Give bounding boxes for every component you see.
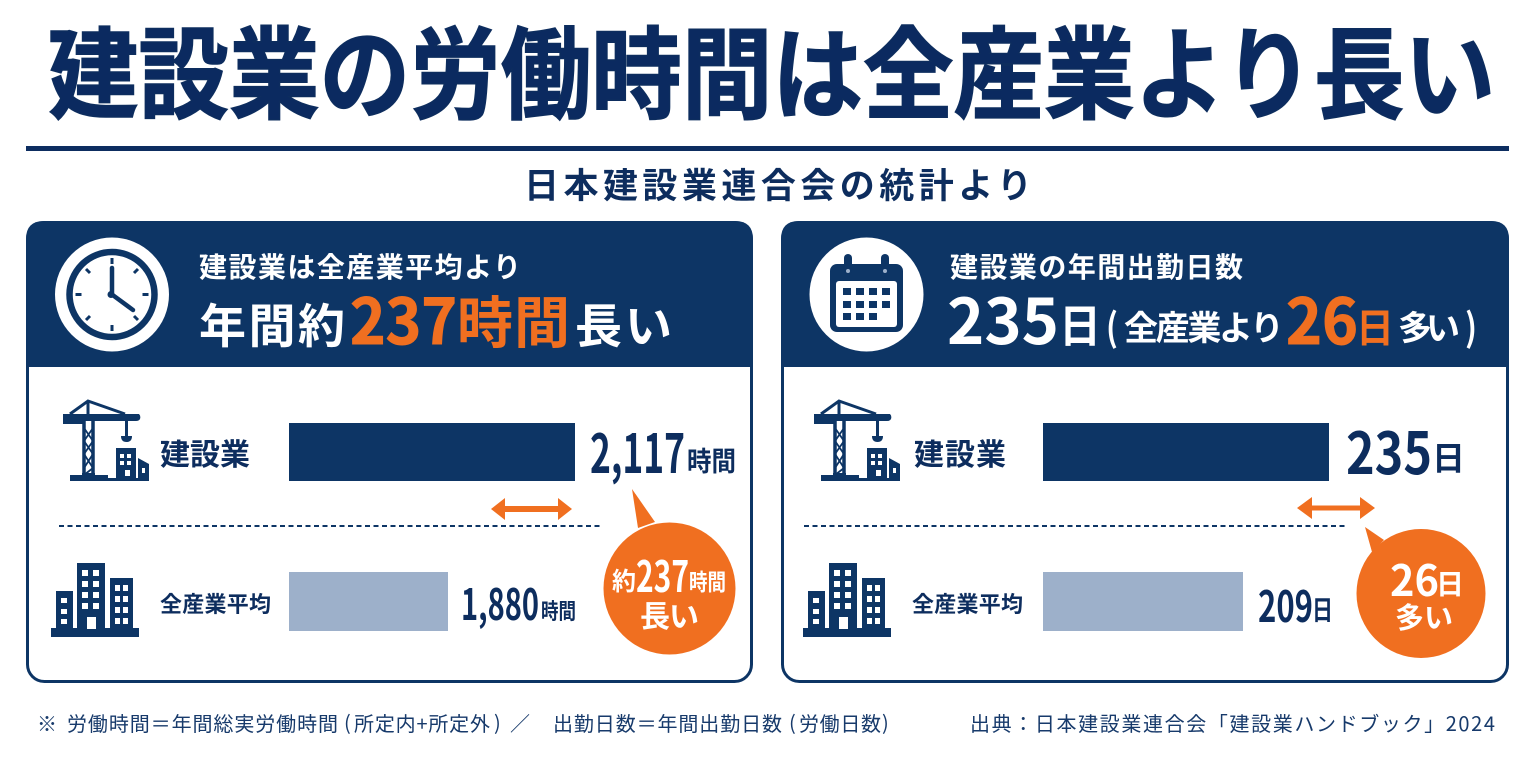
footnote: 所定内+所定外 (354, 708, 490, 737)
value: 235 days: 235 (1346, 407, 1432, 491)
header text: working hours: 時間 (457, 279, 570, 360)
row: construction days (814, 401, 1465, 491)
bar: all-industry 209 days (1043, 572, 1243, 631)
arrow: difference (1297, 497, 1375, 519)
bar: construction 235 days (1043, 423, 1329, 481)
footnote: ※ (37, 708, 57, 737)
icon: crane (63, 401, 149, 481)
footnote: ( (344, 707, 351, 736)
header text: working hours: 長い (575, 288, 672, 357)
callout: 237 hours longer: 長い (640, 592, 699, 636)
icon: office buildings (51, 563, 139, 637)
header text: working days: ) (1465, 297, 1477, 352)
callout: 237 hours longer (604, 489, 736, 654)
header text: working days: 多い (1398, 301, 1460, 350)
footnote (37, 707, 889, 737)
callout: 237 hours longer: 約 (612, 562, 636, 598)
panel header: working days (781, 221, 1509, 367)
row: all-industry hours: 全産業平均 (160, 587, 271, 619)
value: 2,117 hours: 2,117 (590, 410, 685, 489)
callout: 26 days more: 多い (1395, 595, 1453, 637)
header text: working days: 26 (1286, 272, 1358, 363)
icon: crane (814, 401, 900, 481)
footnote: ( (789, 707, 796, 736)
value: 1,880 hours: 1,880 (461, 571, 539, 633)
source: 出典：日本建設業連合会「建設業ハンドブック」2024 (970, 708, 1495, 737)
footnote: ／ (510, 708, 530, 737)
bar: construction 2,117 hours (289, 423, 575, 481)
header text: working days: ( (1106, 297, 1118, 352)
footnote: 労働日数 (799, 708, 881, 737)
footnote: ) (494, 707, 501, 736)
value: 209 days: 日 (1312, 589, 1333, 628)
header text: working days: 日 (1059, 290, 1101, 355)
panel header: working hours (26, 221, 753, 367)
footnote: ) (882, 707, 889, 736)
row: all-industry days: 全産業平均 (912, 587, 1023, 619)
header text: working days: 建設業の年間出勤日数 (950, 246, 1243, 286)
header text: working hours: 年間約 (199, 288, 345, 357)
subtitle: 日本建設業連合会の統計より (524, 158, 1032, 209)
callout: 26 days more (1356, 527, 1486, 658)
header text: working days: 日 (1356, 296, 1394, 354)
footnote: 労働時間＝年間総実労働時間 (67, 708, 338, 737)
row: construction days: 建設業 (914, 430, 1006, 474)
icon: clock (55, 238, 169, 352)
panel: working hours (26, 221, 753, 682)
row: all-industry hours (51, 563, 576, 637)
footnote: 出勤日数＝年間出勤日数 (553, 708, 782, 737)
callout: 26 days more: 日 (1436, 563, 1464, 603)
header text: working days (947, 246, 1477, 363)
header text: working days: 235 (947, 272, 1059, 363)
icon: calendar (810, 238, 924, 352)
header text: working hours (199, 246, 672, 363)
panel: working days (781, 221, 1509, 682)
arrow: difference (491, 498, 572, 520)
value: 2,117 hours: 時間 (687, 440, 736, 479)
callout: 237 hours longer: 時間 (689, 563, 726, 597)
header text: working days: 全産業より (1124, 301, 1284, 350)
bar: all-industry 1,880 hours (289, 572, 448, 631)
icon: office buildings (803, 563, 891, 637)
header text: working hours: 建設業は全産業平均より (199, 246, 521, 286)
value: 209 days: 209 (1258, 573, 1313, 635)
row: construction hours (63, 401, 736, 489)
callout: 26 days more: 26 (1390, 547, 1439, 609)
value: 1,880 hours: 時間 (541, 594, 576, 626)
header text: working hours: 237 (350, 272, 457, 363)
value: 235 days: 日 (1432, 432, 1465, 480)
row: construction hours: 建設業 (160, 430, 250, 474)
row: all-industry days (803, 563, 1333, 637)
callout: 237 hours longer: 237 (636, 543, 689, 605)
